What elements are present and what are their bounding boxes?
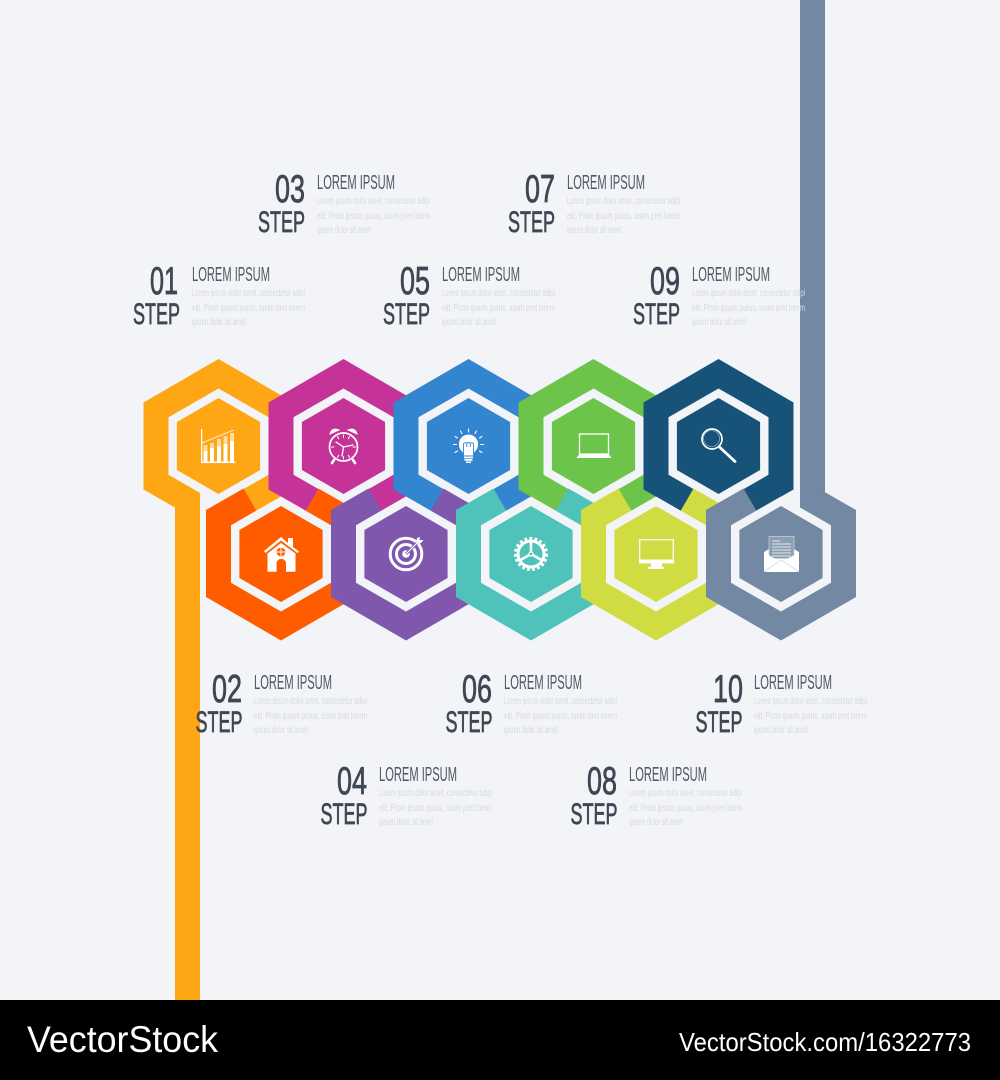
icon: light bulb: [454, 429, 484, 463]
step 04 text: LOREM IPSUM: [379, 764, 457, 786]
icon: target: [390, 537, 424, 570]
step 09 text: LOREM IPSUM: [692, 264, 770, 286]
step 09 text: [633, 260, 805, 331]
step 05 text: [383, 260, 555, 331]
icon: magnifier: [702, 429, 735, 462]
step 06 text: 06: [462, 668, 492, 711]
step 08 text: LOREM IPSUM: [629, 764, 707, 786]
step 02 text: ipsum dolor sit amet: [254, 725, 308, 736]
step 05 text: elit. Proin ipsum purus, iusim pret lorem: [442, 303, 555, 314]
step 02 text: STEP: [196, 706, 242, 739]
step 08 text: [570, 760, 742, 831]
step 09 text: Lorem ipsum dolor amet, consectetur adipi: [692, 288, 805, 299]
step 10 text: [696, 668, 867, 739]
step 03 text: 03: [275, 168, 305, 211]
hexagon 10: slate gray with stem: [706, 0, 856, 640]
step 08 text: elit. Proin ipsum purus, iusim pret lorem: [629, 803, 742, 814]
step 10 text: STEP: [696, 706, 742, 739]
step 01 text: Lorem ipsum dolor amet, consectetur adipi: [192, 288, 305, 299]
step 07 text: LOREM IPSUM: [567, 172, 645, 194]
watermark footer bar: VectorStock: [27, 1019, 218, 1060]
step 06 text: LOREM IPSUM: [504, 672, 582, 694]
step 06 text: Lorem ipsum dolor amet, consectetur adipi: [504, 696, 617, 707]
step 06 text: elit. Proin ipsum purus, iusim pret lorem: [504, 711, 617, 722]
hexagon 09: navy: [644, 359, 794, 511]
step 09 text: elit. Proin ipsum purus, iusim pret lorem: [692, 303, 805, 314]
step 10 text: LOREM IPSUM: [754, 672, 832, 694]
step 02 text: [196, 668, 367, 739]
icon: open envelope: [764, 536, 799, 572]
step 04 text: elit. Proin ipsum purus, iusim pret lorem: [379, 803, 492, 814]
step 08 text: STEP: [570, 798, 618, 831]
icon: desktop monitor: [639, 540, 674, 569]
step 08 text: Lorem ipsum dolor amet, consectetur adipi: [629, 788, 742, 799]
step 01 text: 01: [150, 260, 178, 303]
step 06 text: ipsum dolor sit amet: [504, 725, 558, 736]
step 10 text: Lorem ipsum dolor amet, consectetur adipi: [754, 696, 867, 707]
step 02 text: Lorem ipsum dolor amet, consectetur adipi: [254, 696, 367, 707]
step 03 text: ipsum dolor sit amet: [317, 225, 371, 236]
step 03 text: [258, 168, 430, 239]
step 04 text: 04: [337, 760, 367, 803]
step 09 text: ipsum dolor sit amet: [692, 317, 746, 328]
step 03 text: elit. Proin ipsum purus, iusim pret lorem: [317, 211, 430, 222]
hexagon 03: magenta: [268, 359, 418, 511]
step 07 text: [508, 168, 680, 239]
step 05 text: STEP: [383, 298, 430, 331]
step 01 text: ipsum dolor sit amet: [192, 317, 246, 328]
step 07 text: 07: [525, 168, 555, 211]
step 06 text: [446, 668, 617, 739]
hexagon 07: green: [518, 359, 668, 511]
hexagon 05: blue: [394, 359, 544, 511]
step 07 text: ipsum dolor sit amet: [567, 225, 621, 236]
step 01 text: LOREM IPSUM: [192, 264, 270, 286]
step 05 text: Lorem ipsum dolor amet, consectetur adipi: [442, 288, 555, 299]
hexagon 01: orange-yellow with stem: [144, 359, 294, 1000]
watermark footer bar: VectorStock.com/16322773: [679, 1027, 971, 1057]
step 03 text: Lorem ipsum dolor amet, consectetur adipi: [317, 196, 430, 207]
step 07 text: Lorem ipsum dolor amet, consectetur adipi: [567, 196, 680, 207]
icon: house: [264, 537, 299, 572]
step 07 text: elit. Proin ipsum purus, iusim pret lorem: [567, 211, 680, 222]
step 08 text: 08: [587, 760, 617, 803]
step 03 text: STEP: [258, 206, 305, 239]
step 07 text: STEP: [508, 206, 555, 239]
step 04 text: [320, 760, 492, 831]
watermark footer bar: [0, 1000, 1000, 1080]
step 02 text: elit. Proin ipsum purus, iusim pret lorem: [254, 711, 367, 722]
hexagon 02: orange: [206, 488, 356, 640]
icon: gear: [515, 538, 547, 570]
step 04 text: STEP: [320, 798, 368, 831]
step 10 text: 10: [713, 668, 743, 711]
step 04 text: Lorem ipsum dolor amet, consectetur adipi: [379, 788, 492, 799]
step 03 text: LOREM IPSUM: [317, 172, 395, 194]
icon: alarm clock: [330, 429, 358, 463]
step 01 text: elit. Proin ipsum purus, iusim pret lorem: [192, 303, 305, 314]
step 05 text: LOREM IPSUM: [442, 264, 520, 286]
step 05 text: ipsum dolor sit amet: [442, 317, 496, 328]
step 02 text: 02: [212, 668, 242, 711]
hexagon 06: teal: [456, 488, 606, 640]
step 09 text: STEP: [633, 298, 680, 331]
step 09 text: 09: [650, 260, 680, 303]
step 01 text: [133, 260, 305, 331]
hexagon 08: lime: [581, 488, 731, 640]
step 02 text: LOREM IPSUM: [254, 672, 332, 694]
hexagon 04: purple: [331, 488, 481, 640]
icon: bar chart: [201, 429, 236, 463]
step 05 text: 05: [400, 260, 430, 303]
step 04 text: ipsum dolor sit amet: [379, 817, 433, 828]
step 06 text: STEP: [446, 706, 492, 739]
step 01 text: STEP: [133, 298, 180, 331]
step 10 text: elit. Proin ipsum purus, iusim pret lorem: [754, 711, 867, 722]
step 10 text: ipsum dolor sit amet: [754, 725, 808, 736]
icon: laptop: [576, 434, 612, 458]
step 08 text: ipsum dolor sit amet: [629, 817, 683, 828]
